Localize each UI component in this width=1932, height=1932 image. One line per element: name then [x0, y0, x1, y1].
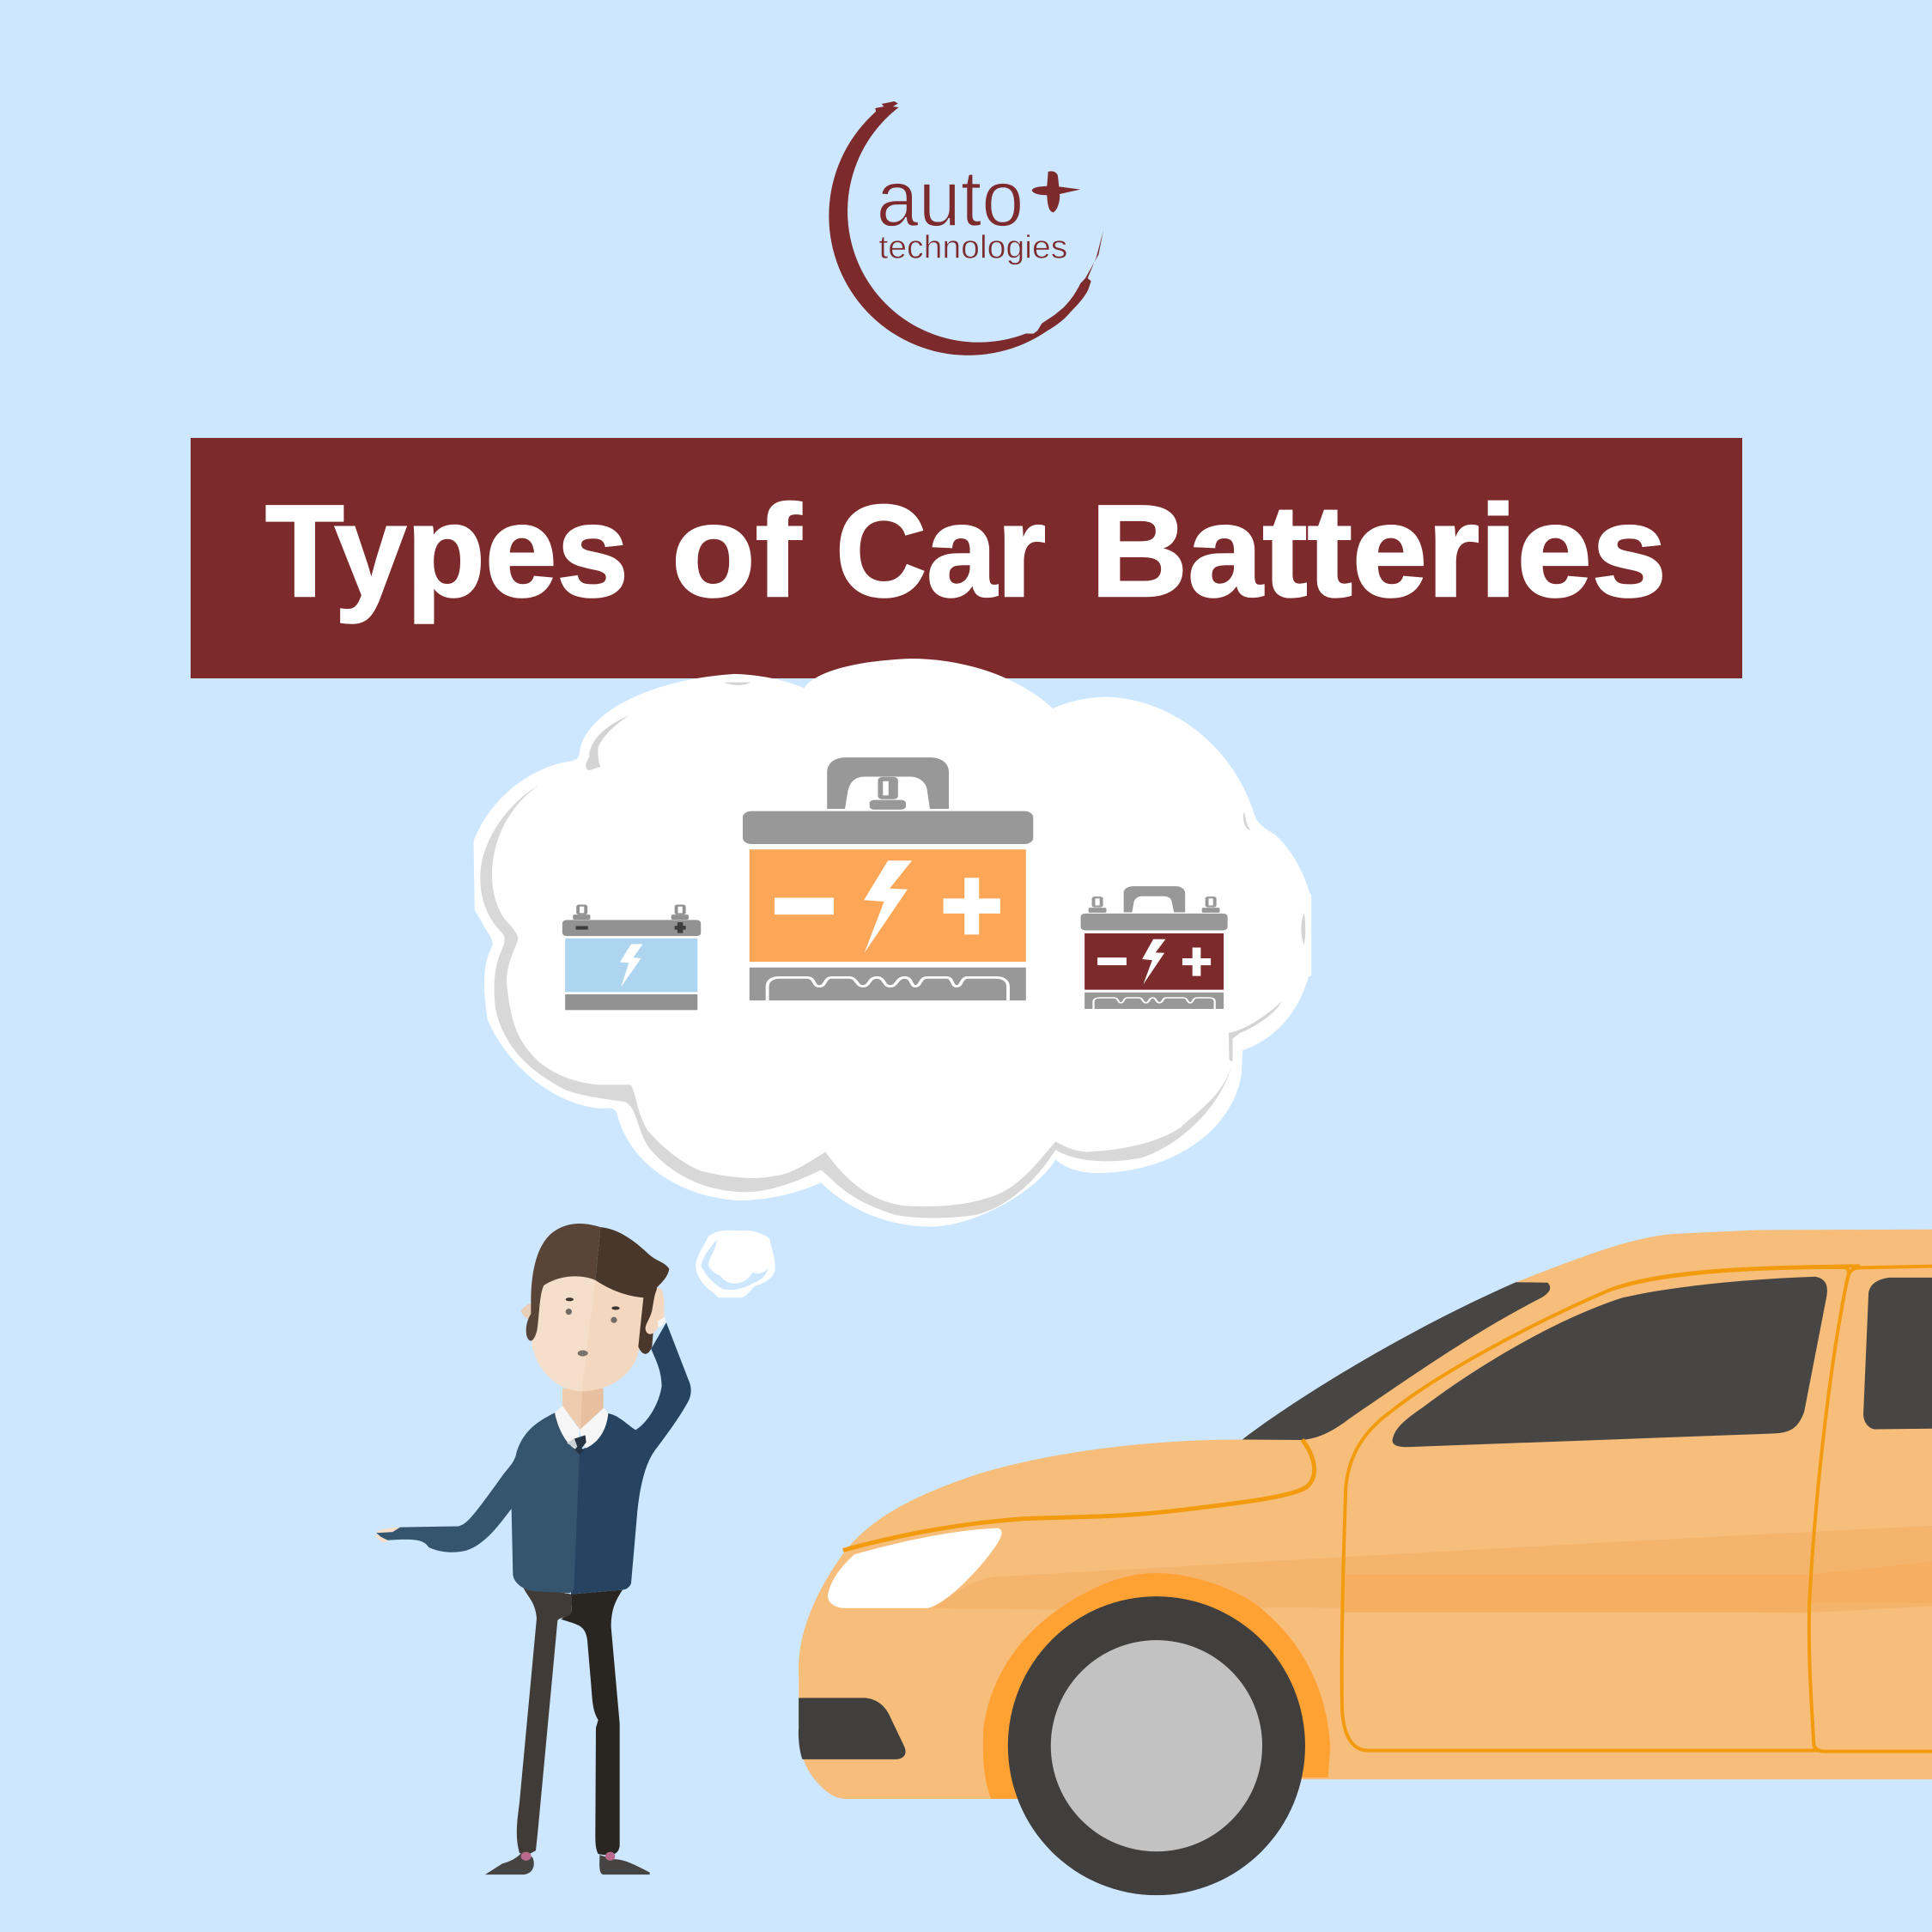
left sock — [521, 1852, 532, 1861]
logo brush ring — [829, 101, 1103, 355]
cuff — [658, 1317, 666, 1327]
cloud grey shadow band — [480, 785, 1231, 1218]
rear door window — [1863, 1278, 1932, 1430]
headlight — [828, 1528, 1002, 1608]
battery: small red — [1081, 886, 1228, 1009]
orange battery plus — [944, 878, 1000, 934]
collar left — [555, 1406, 580, 1449]
orange car — [799, 1229, 1932, 1895]
orange battery terminal — [870, 777, 906, 810]
person scratching his head — [375, 1224, 775, 1874]
battery: large orange — [743, 757, 1033, 1000]
face — [532, 1276, 643, 1391]
blue battery case — [565, 939, 697, 992]
tie — [574, 1435, 586, 1455]
bubble blue ring — [702, 1239, 769, 1290]
bubble white outer — [696, 1230, 775, 1297]
right shoe — [599, 1855, 650, 1874]
front door window — [1393, 1277, 1827, 1447]
neck right — [580, 1388, 604, 1430]
hand on head — [646, 1287, 664, 1334]
front tyre — [1008, 1596, 1305, 1895]
orange battery case — [750, 849, 1026, 962]
body highlight band — [932, 1523, 1932, 1613]
hair right — [595, 1227, 669, 1354]
blue battery terminal slots — [580, 907, 683, 913]
wheel rim — [1051, 1640, 1262, 1851]
hair — [526, 1224, 669, 1354]
eyes — [566, 1309, 617, 1323]
thought cloud with batteries — [473, 659, 1311, 1227]
orange battery handle — [827, 757, 949, 809]
neck left — [562, 1388, 584, 1430]
battery: small blue — [562, 905, 701, 1010]
rear door outline — [1814, 1265, 1932, 1752]
door top trim — [1608, 1266, 1860, 1291]
left shoe — [485, 1853, 534, 1874]
wheel arch — [983, 1573, 1330, 1799]
shoes — [485, 1853, 650, 1874]
face left — [532, 1276, 595, 1391]
collar shade — [567, 1437, 579, 1449]
logo plus mark — [1032, 171, 1080, 212]
logo word: auto: auto — [877, 154, 1024, 243]
face right — [581, 1280, 643, 1391]
sweater — [376, 1322, 691, 1595]
title banner — [191, 438, 1742, 678]
right leg — [561, 1590, 623, 1855]
orange battery lid — [743, 811, 1033, 844]
sweater right half and raised arm — [571, 1322, 691, 1595]
hood line — [843, 1439, 1315, 1550]
small thought bubble — [696, 1230, 775, 1297]
logo: auto+ technologies — [829, 101, 1103, 355]
left leg — [517, 1585, 572, 1854]
orange battery bolt — [864, 860, 912, 952]
red battery symbols — [1097, 939, 1211, 984]
trousers — [517, 1585, 623, 1855]
collar right — [580, 1408, 608, 1449]
body shadow band — [1342, 1556, 1932, 1613]
face features — [566, 1297, 620, 1357]
sweater left half and outstretched arm — [376, 1413, 580, 1593]
orange battery terminal slot — [883, 781, 889, 795]
hand lower — [375, 1534, 388, 1542]
red battery terminal slots — [1095, 898, 1213, 905]
blue battery polarity marks — [576, 922, 686, 933]
car body — [799, 1229, 1932, 1799]
banner background — [191, 438, 1742, 678]
cloud outline — [473, 659, 1311, 1227]
red battery base — [1084, 993, 1224, 1009]
left ear — [521, 1303, 534, 1320]
hand upper — [376, 1528, 400, 1533]
orange battery minus — [775, 898, 834, 914]
socks — [521, 1852, 615, 1861]
front bumper vent — [799, 1698, 906, 1759]
title text: Batteries — [1091, 478, 1667, 624]
windshield — [1242, 1282, 1550, 1440]
orange battery base ridges — [768, 977, 1008, 1000]
title text — [265, 478, 1667, 624]
title text: Car — [835, 478, 1046, 624]
blue battery terminals and lid — [562, 905, 701, 1010]
red battery handle, terminals and lid — [1081, 886, 1228, 930]
hair left — [526, 1224, 600, 1340]
body panel lines — [843, 1265, 1932, 1752]
right sock — [605, 1852, 615, 1861]
cloud shadow accents — [586, 683, 1305, 1062]
nose — [578, 1350, 588, 1357]
shirt collar — [555, 1406, 608, 1449]
orange battery base — [750, 968, 1026, 1000]
red battery case — [1084, 933, 1224, 990]
title text: Types — [265, 478, 629, 624]
outstretched hand — [375, 1528, 400, 1542]
red battery base ridges — [1094, 998, 1215, 1009]
front door outline — [1342, 1267, 1849, 1751]
title text: of — [671, 478, 801, 624]
blue battery bolt — [620, 945, 643, 987]
neck — [562, 1388, 604, 1430]
eyebrows — [566, 1297, 620, 1310]
logo word: technologies: technologies — [878, 229, 1067, 265]
